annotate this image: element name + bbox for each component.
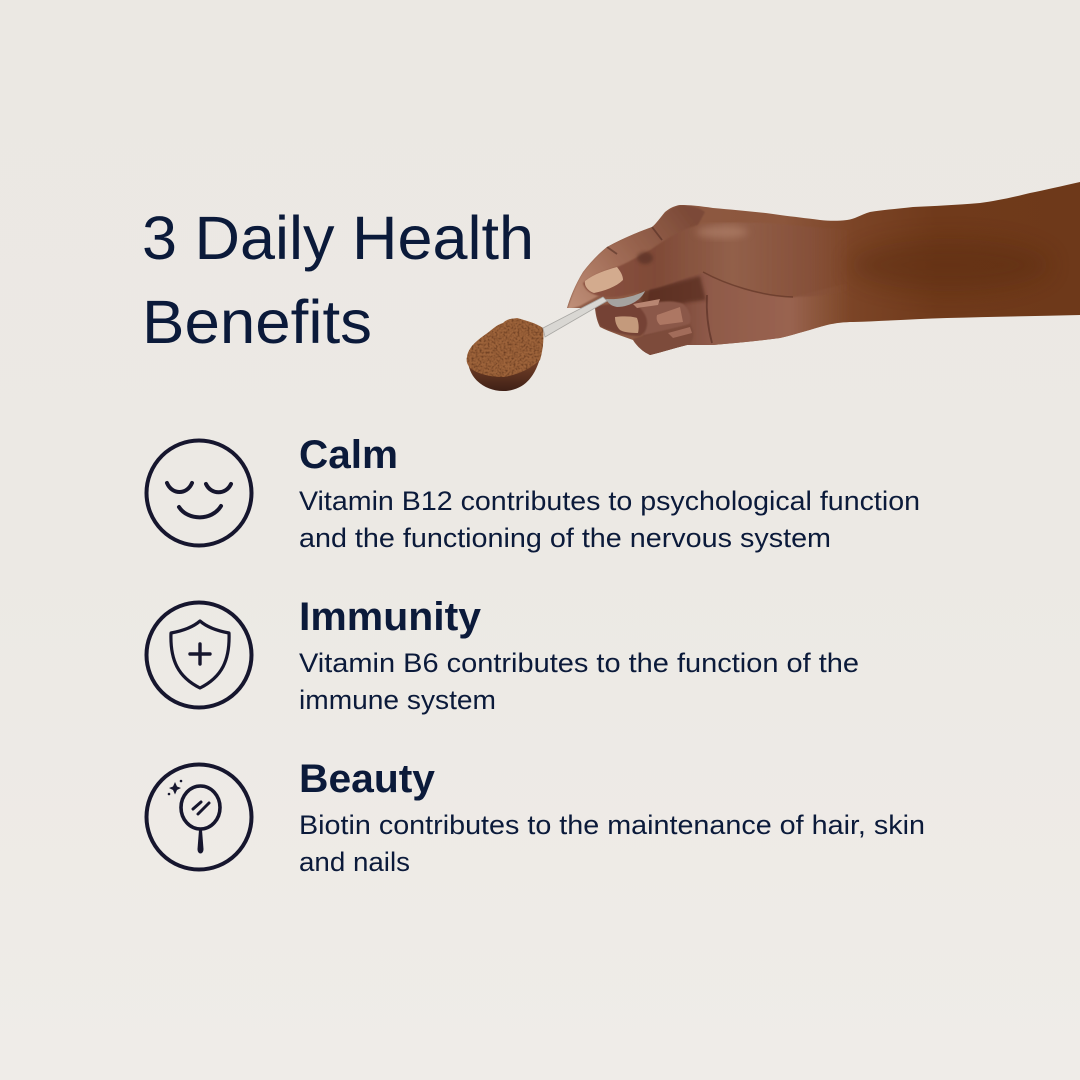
- text: beauty description: Biotin contributes to the maintenance of hair, skin: [299, 810, 925, 840]
- icon: smiling face: [146, 440, 252, 546]
- text: calm description: and the functioning of the nervous system: [299, 523, 831, 553]
- creases: [703, 272, 793, 297]
- heading: immunity: Immunity: [299, 595, 482, 639]
- finger nails: [615, 316, 639, 333]
- hand shading: [567, 205, 1050, 360]
- dark gap behind fingers: [639, 276, 706, 304]
- title: 3 Daily Health: [142, 204, 534, 272]
- knuckle and wrist tones: [696, 226, 748, 238]
- index finger: [567, 205, 705, 310]
- little finger: [633, 324, 693, 356]
- scoop bowl: [468, 358, 540, 391]
- text: calm description: Vitamin B12 contributes to psychological function: [299, 486, 920, 516]
- item: beauty: [146, 757, 925, 877]
- title: Benefits: [142, 288, 372, 356]
- heading: beauty: Beauty: [299, 757, 436, 801]
- ring finger: [640, 301, 691, 336]
- text: immunity description: immune system: [299, 685, 496, 715]
- photo: hand holding scoop of powder: [467, 182, 1080, 391]
- icon: hand mirror with sparkle: [146, 764, 252, 870]
- title: [142, 204, 534, 356]
- text: immunity description: [299, 648, 859, 715]
- item: immunity: [146, 595, 859, 715]
- item: calm: [146, 433, 920, 553]
- spoon handle: [543, 297, 607, 337]
- middle finger: [595, 300, 648, 336]
- powder: [467, 318, 543, 377]
- icon: shield with plus: [146, 602, 252, 708]
- thumb nail: [585, 267, 623, 293]
- text: beauty description: and nails: [299, 847, 410, 877]
- text: immunity description: Vitamin B6 contributes to the function of the: [299, 648, 859, 678]
- back of hand and thumb: [582, 223, 810, 297]
- palm: [642, 276, 834, 355]
- text: beauty description: [299, 810, 925, 877]
- arm and hand: [567, 182, 1080, 355]
- spoon ring in hand: [606, 291, 645, 307]
- text: calm description: [299, 486, 920, 553]
- heading: calm: Calm: [299, 433, 398, 477]
